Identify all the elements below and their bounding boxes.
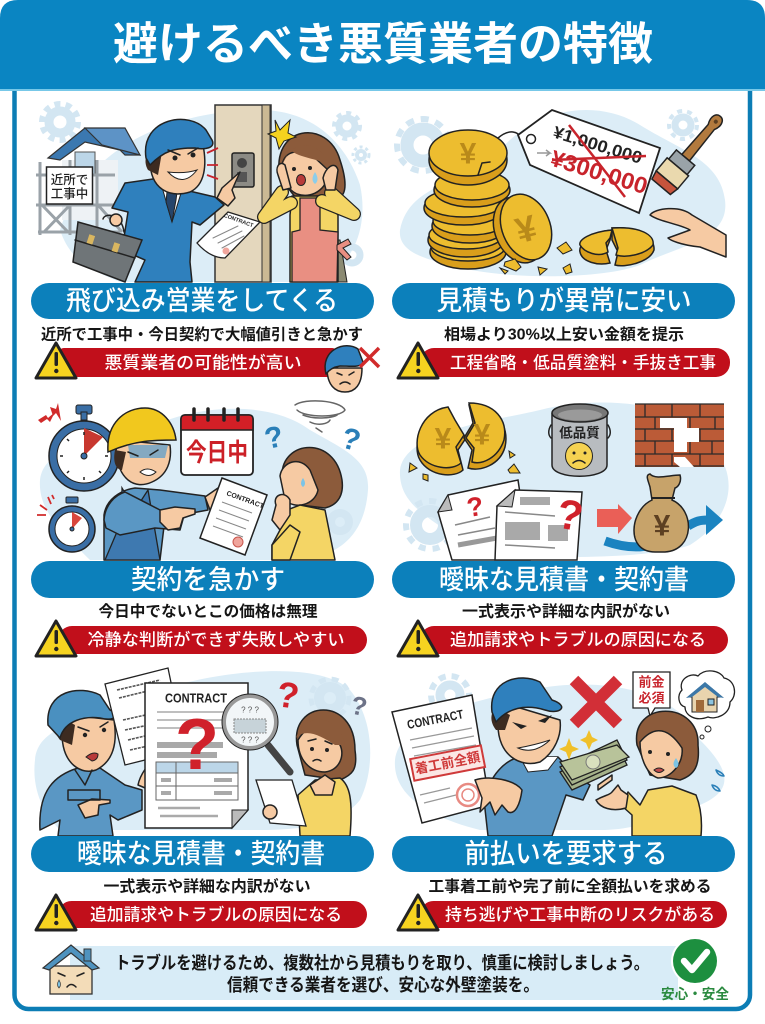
illustration: worker rushing woman: ? <box>262 420 286 456</box>
panel: demands prepayment <box>392 671 735 930</box>
illustration: coins and price tag: ¥1,000,000 <box>551 123 644 168</box>
contract <box>200 478 267 555</box>
low quality paint can: 低品質 <box>559 424 600 440</box>
heading pill: 前払いを要求する <box>464 839 668 869</box>
sign: 前金必須: 前金 <box>638 674 665 690</box>
low quality paint can <box>549 404 610 476</box>
label: 安心・安全: 安心・安全 <box>661 986 729 1002</box>
heading pill <box>31 561 374 598</box>
illustration: salesman at door: CONTRACT <box>223 213 254 229</box>
icon: angry worker with red x <box>325 346 379 392</box>
icon: warning triangle <box>36 621 76 656</box>
footer text: 信頼できる業者を選び、安心な外壁塗装を。 <box>227 975 539 995</box>
heading pill: 曖昧な見積書・契約書 <box>77 839 325 869</box>
heading pill <box>392 836 735 872</box>
warning bar <box>420 901 727 928</box>
big stopwatch <box>49 405 119 491</box>
illustration: coins and price tag <box>397 107 731 276</box>
worker <box>104 408 222 560</box>
heading pill: 飛び込み営業をしてくる <box>66 286 338 316</box>
documents: ? <box>553 490 587 540</box>
warning bar <box>58 348 338 377</box>
panel: vague contract with magnifier <box>31 668 374 930</box>
warning bar <box>58 901 367 928</box>
woman <box>596 711 724 836</box>
illustration: worker, contract, woman: ? <box>274 673 302 717</box>
calendar: 今日中 <box>186 439 248 467</box>
illustration: worker rushing woman: ? <box>338 422 364 458</box>
contract sheet <box>392 695 490 823</box>
illustration: coins and price tag: ¥ <box>511 207 541 251</box>
warning bar <box>58 626 367 654</box>
illustration: worker, contract, woman <box>34 668 370 836</box>
arrow: red <box>597 504 632 534</box>
sign: 近所で工事中: 工事中 <box>51 186 88 201</box>
illustration: worker demanding money <box>392 671 735 836</box>
description: 近所で工事中・今日契約で大幅値引きと急かす <box>41 324 363 344</box>
illustration: worker rushing woman <box>37 401 368 560</box>
sign: 前金必須 <box>633 672 670 716</box>
warning bar: 追加請求やトラブルの原因になる <box>90 904 342 924</box>
woman <box>272 448 342 560</box>
heading pill: 見積もりが異常に安い <box>436 286 692 316</box>
footer text: トラブルを避けるため、複数社から見積もりを取り、慎重に検討しましょう。 <box>115 953 649 973</box>
title banner <box>0 0 765 91</box>
contract paper <box>197 212 260 258</box>
warning bar: 冷静な判断ができず失敗しやすい <box>88 630 344 650</box>
title: 避けるべき悪質業者の特徴 <box>113 18 653 70</box>
cracked coin: ¥ <box>435 422 452 456</box>
small stopwatch <box>49 497 95 552</box>
heading pill <box>31 836 374 872</box>
magnifying glass <box>222 694 290 772</box>
panel: abnormally cheap quote <box>392 107 735 378</box>
illustration: salesman at door <box>36 104 369 282</box>
sign: 近所で工事中: 近所で <box>51 173 88 187</box>
description: 一式表示や詳細な内訳がない <box>104 876 310 896</box>
icon: warning triangle <box>398 621 438 656</box>
warning bar: 悪質業者の可能性が高い <box>104 352 302 372</box>
documents <box>438 480 587 560</box>
icon: warning triangle <box>398 343 438 378</box>
heading pill: 曖昧な見積書・契約書 <box>439 565 689 595</box>
warning bar: 工程省略・低品質塗料・手抜き工事 <box>450 354 716 372</box>
icon: green check <box>671 937 719 985</box>
magnifying glass: ? ? ? <box>241 736 259 744</box>
icon: money bag: ¥ <box>654 510 671 542</box>
contract: CONTRACT <box>225 490 265 511</box>
sign: 前金必須: 必須 <box>638 690 665 706</box>
red cross <box>574 680 618 724</box>
woman <box>256 710 356 836</box>
money stack <box>560 740 629 790</box>
cracked coin: ¥ <box>474 418 491 452</box>
heading pill <box>392 283 735 319</box>
damaged brick wall <box>635 404 724 467</box>
illustration: coins and price tag: ¥300,000 <box>548 145 651 199</box>
icon: warning triangle <box>36 895 76 930</box>
contract document <box>145 683 248 828</box>
illustration: cracked coin, low quality paint, broken wall, documents, money bag <box>400 403 729 560</box>
calendar <box>181 409 253 475</box>
contract sheet: CONTRACT <box>406 707 465 732</box>
description: 工事着工前や完了前に全額払いを求める <box>428 876 712 896</box>
sign: 近所で工事中 <box>46 167 92 204</box>
documents: ? <box>465 491 485 523</box>
heading pill: 契約を急かす <box>131 565 285 595</box>
cracked coin <box>409 403 520 481</box>
icon: blue arrow <box>605 505 723 547</box>
icon: money bag <box>634 474 688 552</box>
description: 一式表示や詳細な内訳がない <box>462 602 670 620</box>
heading pill <box>392 561 735 598</box>
worker <box>40 690 152 836</box>
icon: sad house <box>43 945 99 994</box>
illustration: coins and price tag: ¥ <box>460 138 477 170</box>
description: 今日中でないとこの価格は無理 <box>98 602 318 620</box>
contract document: ? <box>175 705 219 785</box>
stamp: 着工前全額: 着工前全額 <box>414 748 482 777</box>
warning bar <box>420 348 730 377</box>
warning bar: 追加請求やトラブルの原因になる <box>450 630 706 650</box>
panel: door-to-door sales <box>31 104 379 392</box>
magnifying glass: ? ? ? <box>241 706 259 714</box>
woman <box>264 120 354 282</box>
illustration: worker, contract, woman: ? <box>348 690 370 722</box>
warning bar <box>420 626 728 654</box>
description: 相場より30%以上安い金額を提示 <box>444 324 684 344</box>
contract document: CONTRACT <box>165 690 227 706</box>
footer advice band <box>43 937 729 1002</box>
warning bar: 持ち逃げや工事中断のリスクがある <box>445 904 715 924</box>
icon: warning triangle <box>36 343 76 378</box>
thought bubble with house <box>679 671 735 739</box>
panel: vague estimate with coin, can and wall <box>392 403 735 656</box>
panel: rushing the contract <box>31 401 374 656</box>
icon: warning triangle <box>398 895 438 930</box>
back document <box>105 668 185 765</box>
footer text <box>115 953 649 995</box>
worker <box>475 678 590 836</box>
